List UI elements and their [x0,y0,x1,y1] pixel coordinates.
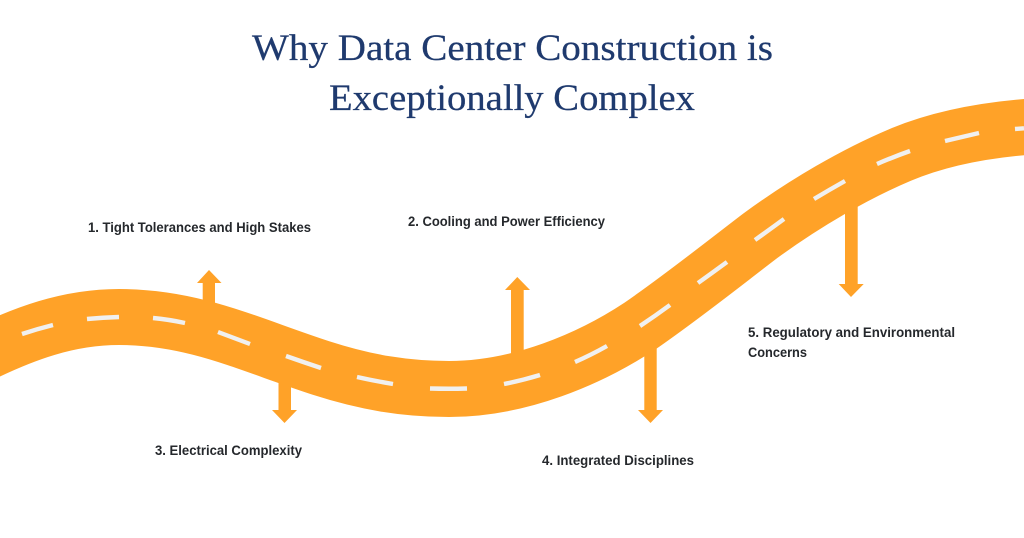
arrow 3: down from road [272,375,297,423]
label 5 [748,325,955,360]
label 1: 1. Tight Tolerances and High Stakes [88,220,311,235]
road centre dashes [22,128,1024,389]
label 5: 5. Regulatory and Environmental [748,325,955,340]
title: Exceptionally Complex [329,78,695,119]
road [0,125,1024,389]
label 4: 4. Integrated Disciplines [542,453,694,468]
title: Why Data Center Construction is [252,28,773,69]
label 5: Concerns [748,345,807,360]
label 3: 3. Electrical Complexity [155,443,302,458]
title [252,28,773,119]
label 2: 2. Cooling and Power Efficiency [408,214,605,229]
arrow 2: up from road [505,277,530,360]
arrow 1: up from road [197,270,222,310]
arrow 4: down from road [638,335,663,423]
arrow 5: down from road [839,185,864,297]
